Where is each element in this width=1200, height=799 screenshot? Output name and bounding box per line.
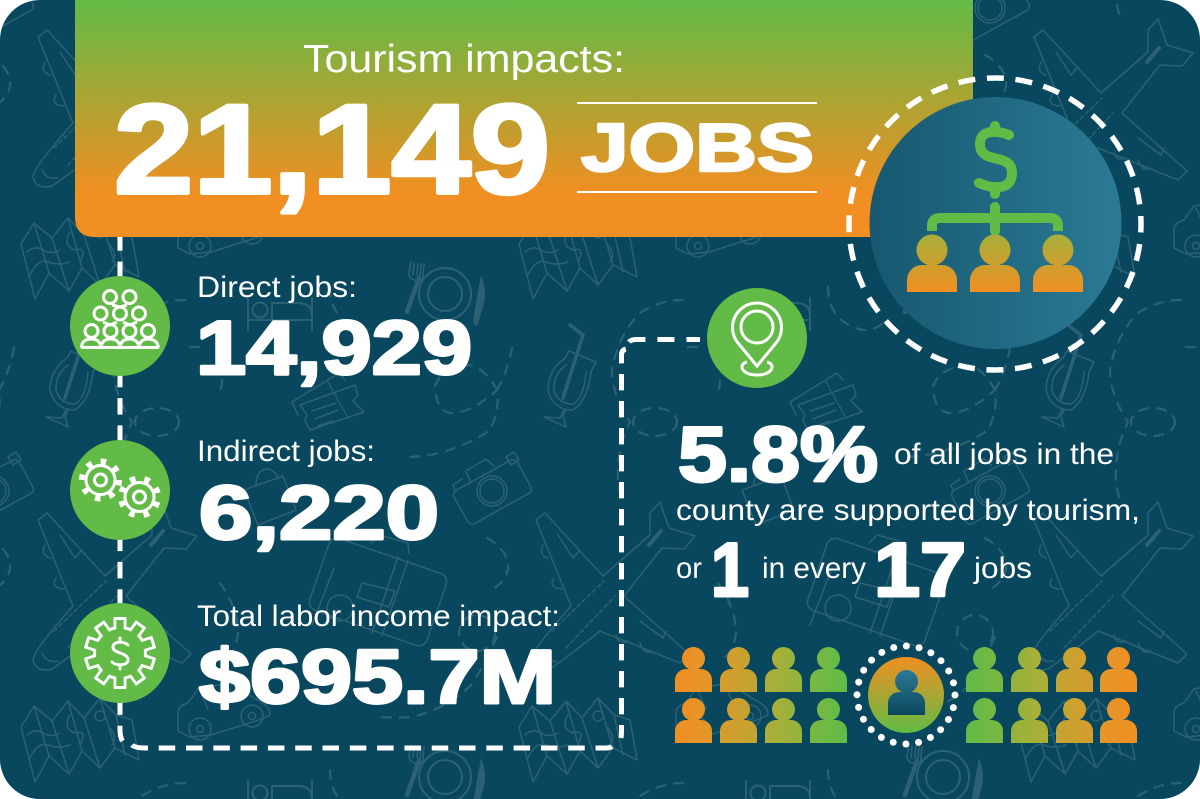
labor income text bbox=[197, 600, 560, 720]
indirect jobs text: Indirect jobs: bbox=[197, 435, 375, 468]
statistic text: share of jobs: of all jobs in the bbox=[894, 438, 1114, 471]
statistic text: share of jobs: 5.8% bbox=[678, 410, 878, 498]
header text bbox=[114, 38, 817, 220]
icon: location pin bbox=[707, 288, 807, 388]
statistic text: share of jobs: 17 bbox=[874, 528, 966, 613]
statistic text: share of jobs: 1 bbox=[711, 528, 749, 613]
direct jobs text bbox=[196, 271, 472, 391]
icon: crowd bbox=[70, 276, 170, 376]
header text: 21,149 bbox=[114, 78, 550, 220]
header banner bbox=[75, 0, 973, 237]
header text: JOBS bbox=[581, 110, 814, 186]
icon: money to people bbox=[870, 97, 1122, 349]
statistic text: share of jobs: county are supported by tourism, bbox=[676, 494, 1140, 527]
people row: right group bbox=[966, 647, 1137, 743]
header text: Tourism impacts: bbox=[303, 38, 625, 81]
highlighted person bbox=[857, 646, 955, 744]
direct jobs text: Direct jobs: bbox=[197, 271, 357, 304]
icon: gear with dollar bbox=[70, 603, 170, 703]
icon: gears bbox=[70, 440, 170, 540]
direct jobs text: 14,929 bbox=[196, 306, 472, 391]
statistic text: share of jobs: in every bbox=[762, 552, 866, 585]
indirect jobs text bbox=[197, 435, 439, 556]
statistic text: share of jobs: jobs bbox=[973, 552, 1032, 585]
dashed connector line bbox=[120, 237, 700, 748]
indirect jobs text: 6,220 bbox=[199, 471, 439, 556]
statistic text: share of jobs: or bbox=[676, 552, 702, 585]
statistic text: share of jobs bbox=[676, 410, 1140, 613]
people row: left group bbox=[675, 647, 847, 743]
labor income text: $695.7M bbox=[199, 635, 556, 720]
dashed ring around money icon bbox=[849, 78, 1141, 370]
labor income text: Total labor income impact: bbox=[197, 600, 560, 633]
